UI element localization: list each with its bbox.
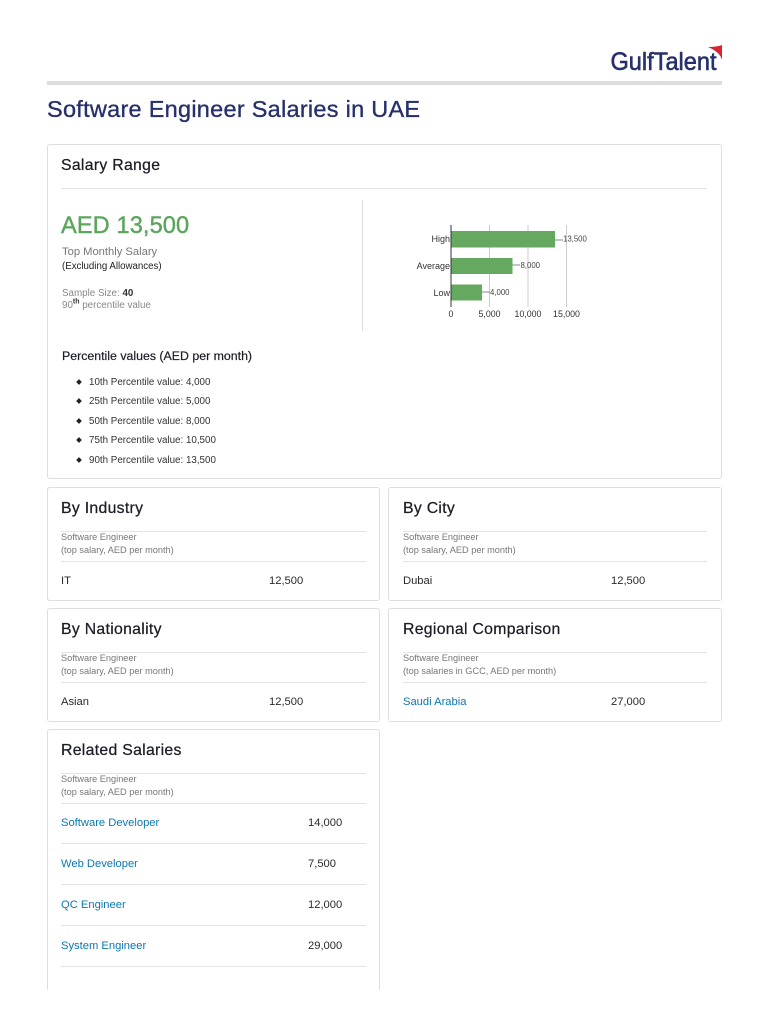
subtitle: regional comparison: (top salaries in GCC, AED per month) (403, 666, 556, 676)
bar chart: high average low: 8,000 (520, 261, 541, 270)
subtitle: related salaries: (top salary, AED per month) (61, 787, 174, 797)
sample size: Sample Size: 40 (62, 288, 133, 299)
percentile note: 90th percentile value (62, 299, 151, 311)
heading: regional comparison: Regional Comparison (403, 621, 561, 638)
row: IT: IT (61, 575, 71, 587)
header rule (47, 81, 722, 85)
panel: by nationality (47, 608, 380, 722)
subtitle: by industry: Software Engineer (61, 532, 137, 542)
value: QC Engineer: 12,000 (308, 899, 342, 911)
bar chart: high average low: 5,000 (478, 309, 501, 319)
bar chart: high average low: 0 (449, 309, 454, 319)
subtitle: by city (403, 532, 516, 555)
value: Web Developer: 7,500 (308, 858, 336, 870)
panel: regional comparison (388, 608, 722, 722)
logo: GulfTalent: GulfTalent (610, 48, 717, 76)
bar chart: high average low (416, 225, 588, 319)
title: Software Engineer Salaries in UAE (47, 96, 420, 122)
bar chart: high average low: 15,000 (553, 309, 580, 319)
value: System Engineer: 29,000 (308, 940, 342, 952)
percentile list: 25th Percentile value: 5,000 (89, 396, 210, 407)
bar chart: high average low: High (431, 234, 450, 244)
allowances note: (Excluding Allowances) (62, 261, 162, 272)
percentile list: 50th Percentile value: 8,000 (89, 416, 210, 427)
percentile heading: Percentile values (AED per month) (62, 349, 252, 363)
heading: related salaries: Related Salaries (61, 742, 182, 759)
panel: by city (388, 487, 722, 601)
bar chart: high average low: 13,500 (563, 234, 588, 244)
subtitle: by industry: (top salary, AED per month) (61, 545, 174, 555)
subtitle: by nationality: (top salary, AED per month) (61, 666, 174, 676)
row: Asian: Asian (61, 696, 89, 708)
panel: by industry (47, 487, 380, 601)
subtitle: by industry (61, 532, 174, 555)
heading: salary range: Salary Range (61, 157, 160, 174)
subtitle: by nationality (61, 653, 174, 676)
subtitle: regional comparison: Software Engineer (403, 653, 479, 663)
value: Asian: 12,500 (269, 696, 303, 708)
row: QC Engineer: QC Engineer (61, 899, 126, 911)
row: System Engineer: System Engineer (61, 940, 146, 952)
subtitle: related salaries (61, 774, 174, 797)
salary caption: Top Monthly Salary (62, 246, 157, 258)
percentile list: 75th Percentile value: 10,500 (89, 435, 216, 446)
value: Software Developer: 14,000 (308, 817, 342, 829)
row: Saudi Arabia: Saudi Arabia (403, 696, 466, 708)
subtitle: related salaries: Software Engineer (61, 774, 137, 784)
panel: related salaries (47, 729, 380, 990)
bar chart: high average low: 4,000 (490, 288, 510, 297)
value: Dubai: 12,500 (611, 575, 645, 587)
subtitle: by nationality: Software Engineer (61, 653, 137, 663)
value: IT: 12,500 (269, 575, 303, 587)
bar chart: high average low: Average (417, 261, 450, 271)
row: Web Developer: Web Developer (61, 858, 138, 870)
bar chart: high average low: 10,000 (515, 309, 542, 319)
percentile list (76, 377, 216, 466)
value: Saudi Arabia: 27,000 (611, 696, 645, 708)
subtitle: by city: (top salary, AED per month) (403, 545, 516, 555)
row: Software Developer: Software Developer (61, 817, 159, 829)
heading: by city: By City (403, 500, 455, 517)
row: Dubai: Dubai (403, 575, 432, 587)
percentile list: 10th Percentile value: 4,000 (89, 377, 210, 388)
panel: salary range (47, 144, 722, 479)
heading: by industry: By Industry (61, 500, 143, 517)
top salary figure: AED 13,500 (61, 213, 189, 239)
percentile list: 90th Percentile value: 13,500 (89, 455, 216, 466)
heading: by nationality: By Nationality (61, 621, 162, 638)
bar chart: high average low: Low (433, 288, 450, 298)
subtitle: by city: Software Engineer (403, 532, 479, 542)
subtitle: regional comparison (403, 653, 556, 676)
